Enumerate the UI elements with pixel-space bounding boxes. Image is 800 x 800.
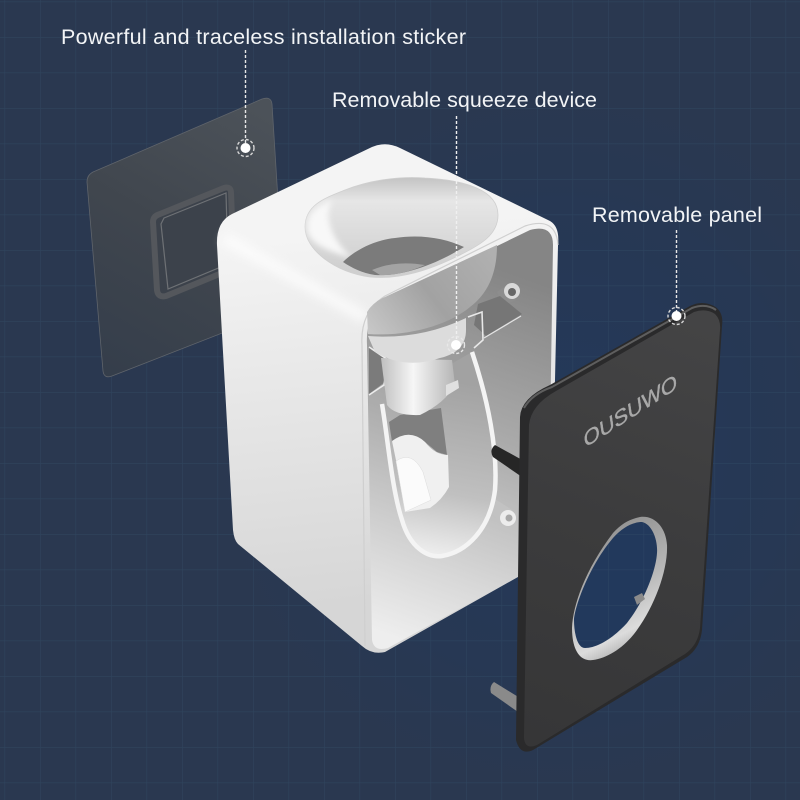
callout: removable panel: Removable panel (592, 203, 762, 227)
dispenser body (217, 144, 558, 653)
brand text: OUSUWO (582, 369, 679, 453)
crease highlight (224, 238, 366, 318)
lower screw boss (488, 497, 516, 526)
bracket right (468, 296, 522, 348)
callout: installation sticker: Powerful and traceless installation sticker (61, 25, 466, 49)
callout: squeeze device (332, 88, 597, 354)
callout: removable panel (592, 203, 762, 324)
collar (368, 318, 466, 363)
hole grid (574, 522, 657, 648)
panel edge (516, 303, 722, 752)
squeeze cylinder (381, 358, 459, 415)
panel top highlight (524, 306, 716, 408)
roller (392, 435, 449, 512)
screw boss top (497, 283, 520, 306)
callout: squeeze device: Removable squeeze device (332, 88, 597, 112)
inner cavity (367, 229, 553, 649)
callout: installation sticker (61, 25, 466, 156)
U-shaped squeeze loop (382, 352, 496, 556)
bracket left (369, 347, 388, 395)
installation sticker (87, 98, 278, 377)
hole (574, 522, 657, 648)
funnel underside (367, 245, 497, 334)
rim lip line (362, 223, 558, 646)
removable black panel (490, 303, 722, 752)
pin inside hole (634, 593, 645, 605)
panel face (524, 310, 720, 746)
sticker square frame (153, 188, 234, 296)
ring around hole (572, 517, 667, 660)
body outer shell (217, 144, 558, 653)
panel pin bottom (490, 682, 520, 712)
bowl opening (305, 178, 498, 278)
panel pin top (491, 445, 524, 477)
